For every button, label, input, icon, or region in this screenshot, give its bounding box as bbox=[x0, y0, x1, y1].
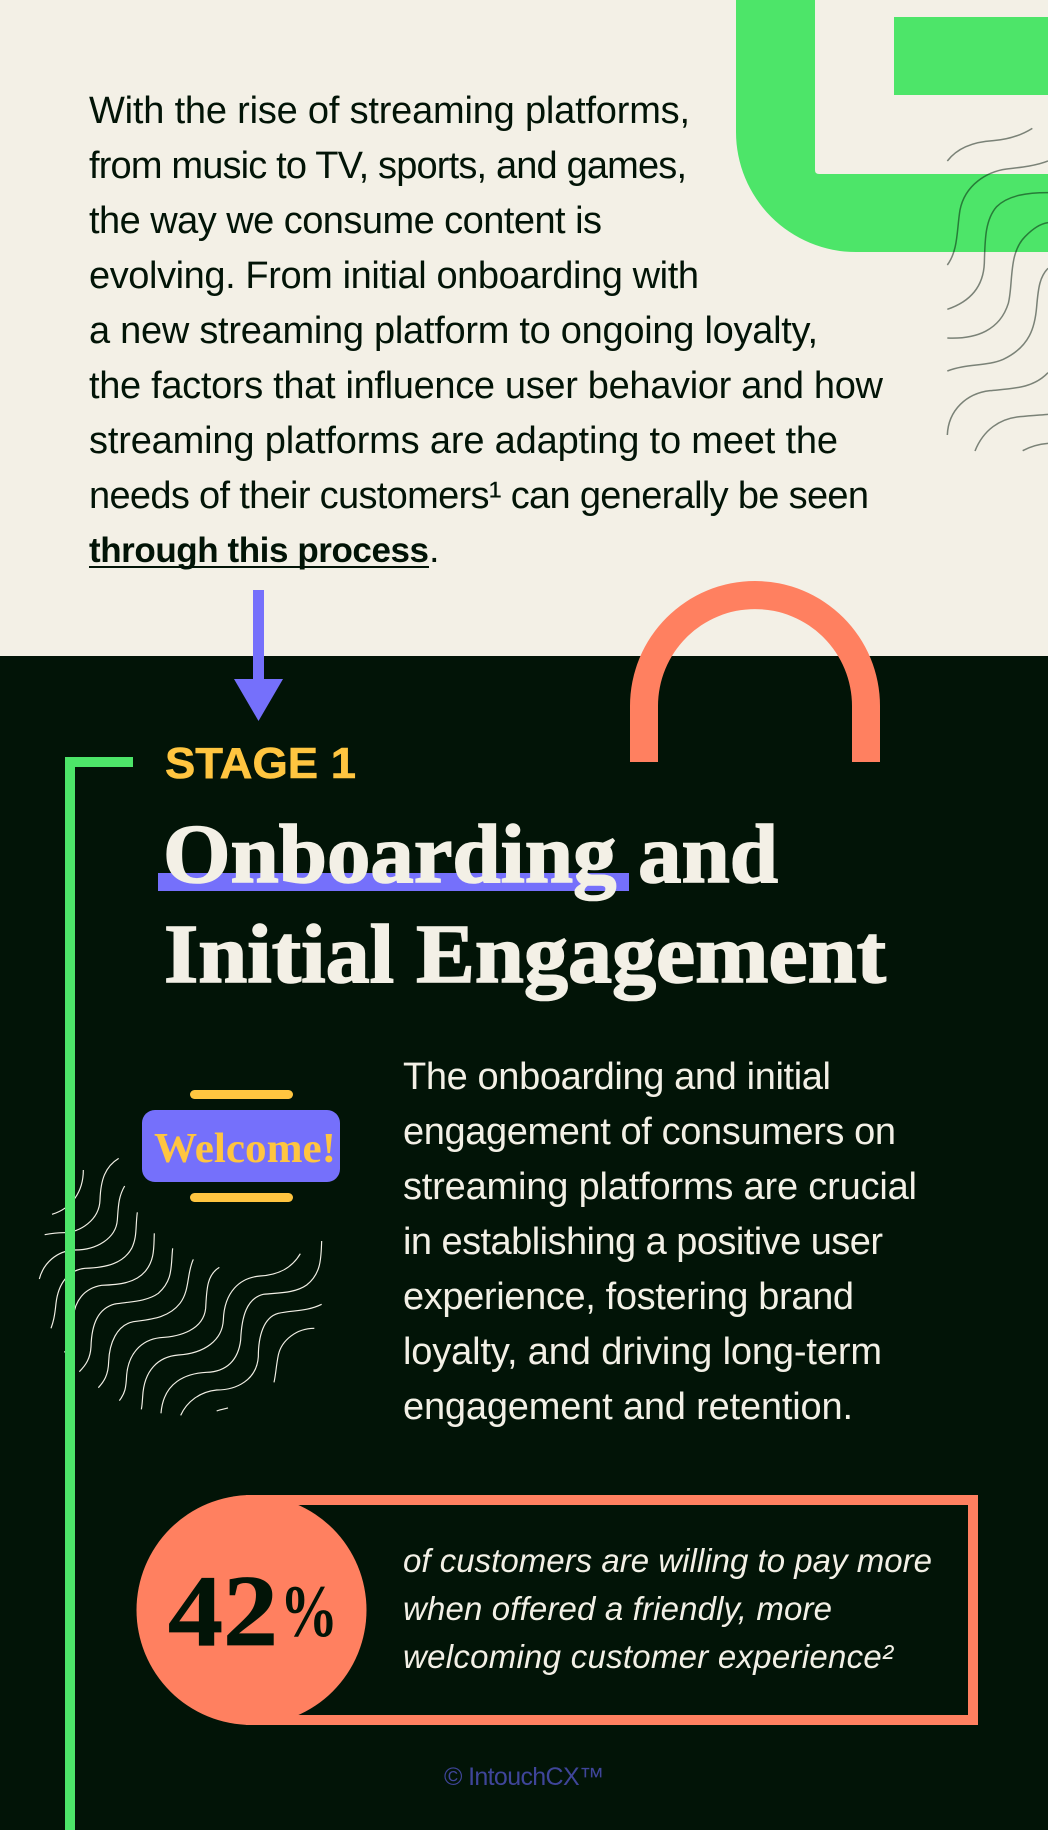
callout: 42 percent statistic: 42 bbox=[168, 1555, 278, 1668]
heading: onboarding and initial engagement: Initial Engagement bbox=[164, 908, 886, 1001]
icon: welcome sign: Welcome! bbox=[154, 1126, 336, 1172]
text block: intro paragraph: With the rise of streaming platforms, bbox=[89, 90, 690, 132]
text block: stage description: engagement of consumers on bbox=[403, 1111, 896, 1153]
panel: dark stage background bbox=[0, 656, 1048, 1830]
text block: stage description: loyalty, and driving long-term bbox=[403, 1331, 882, 1373]
icon: green corner shape bbox=[736, 0, 1048, 252]
text block: intro paragraph: from music to TV, sports, and games, bbox=[89, 145, 687, 187]
timeline: green bracket line bbox=[65, 757, 133, 1830]
text block: stage description: streaming platforms are crucial bbox=[403, 1166, 917, 1208]
label: stage 1: STAGE 1 bbox=[165, 739, 356, 788]
text block: intro paragraph: through this process bbox=[89, 531, 429, 570]
text block: intro paragraph: the factors that influence user behavior and how bbox=[89, 365, 884, 407]
arrow: purple down arrow bbox=[234, 590, 283, 721]
callout: 42 percent statistic bbox=[136, 1495, 973, 1725]
text block: intro paragraph bbox=[89, 90, 884, 571]
text block: intro paragraph: evolving. From initial onboarding with bbox=[89, 255, 699, 297]
icon: welcome sign bbox=[142, 1090, 340, 1202]
decoration: top wavy lines bbox=[947, 128, 1048, 451]
text block: intro paragraph: the way we consume content is bbox=[89, 200, 602, 242]
text block: stage description: experience, fostering brand bbox=[403, 1276, 854, 1318]
text block: intro paragraph: . bbox=[429, 529, 440, 571]
callout: 42 percent statistic: % bbox=[280, 1571, 338, 1653]
heading: onboarding and initial engagement: Onboarding and bbox=[163, 808, 778, 901]
icon: coral arch bbox=[630, 581, 880, 762]
text block: stage description: engagement and retention. bbox=[403, 1386, 853, 1428]
callout: 42 percent statistic: welcoming customer experience² bbox=[403, 1638, 894, 1675]
text block: intro paragraph: needs of their customers¹ can generally be seen bbox=[89, 475, 869, 517]
text block: intro paragraph: a new streaming platform to ongoing loyalty, bbox=[89, 310, 818, 352]
callout: 42 percent statistic: when offered a friendly, more bbox=[403, 1590, 832, 1627]
footer: copyright: © IntouchCX™ bbox=[444, 1763, 604, 1791]
heading: onboarding and initial engagement bbox=[158, 808, 886, 1001]
callout: 42 percent statistic: of customers are willing to pay more bbox=[403, 1542, 932, 1579]
text block: stage description bbox=[403, 1056, 917, 1428]
panel: cream intro background bbox=[0, 0, 1048, 656]
text block: stage description: The onboarding and initial bbox=[403, 1056, 831, 1098]
text block: intro paragraph: streaming platforms are adapting to meet the bbox=[89, 420, 838, 462]
text block: stage description: in establishing a positive user bbox=[403, 1221, 883, 1263]
decoration: lower wavy lines bbox=[39, 1158, 322, 1415]
